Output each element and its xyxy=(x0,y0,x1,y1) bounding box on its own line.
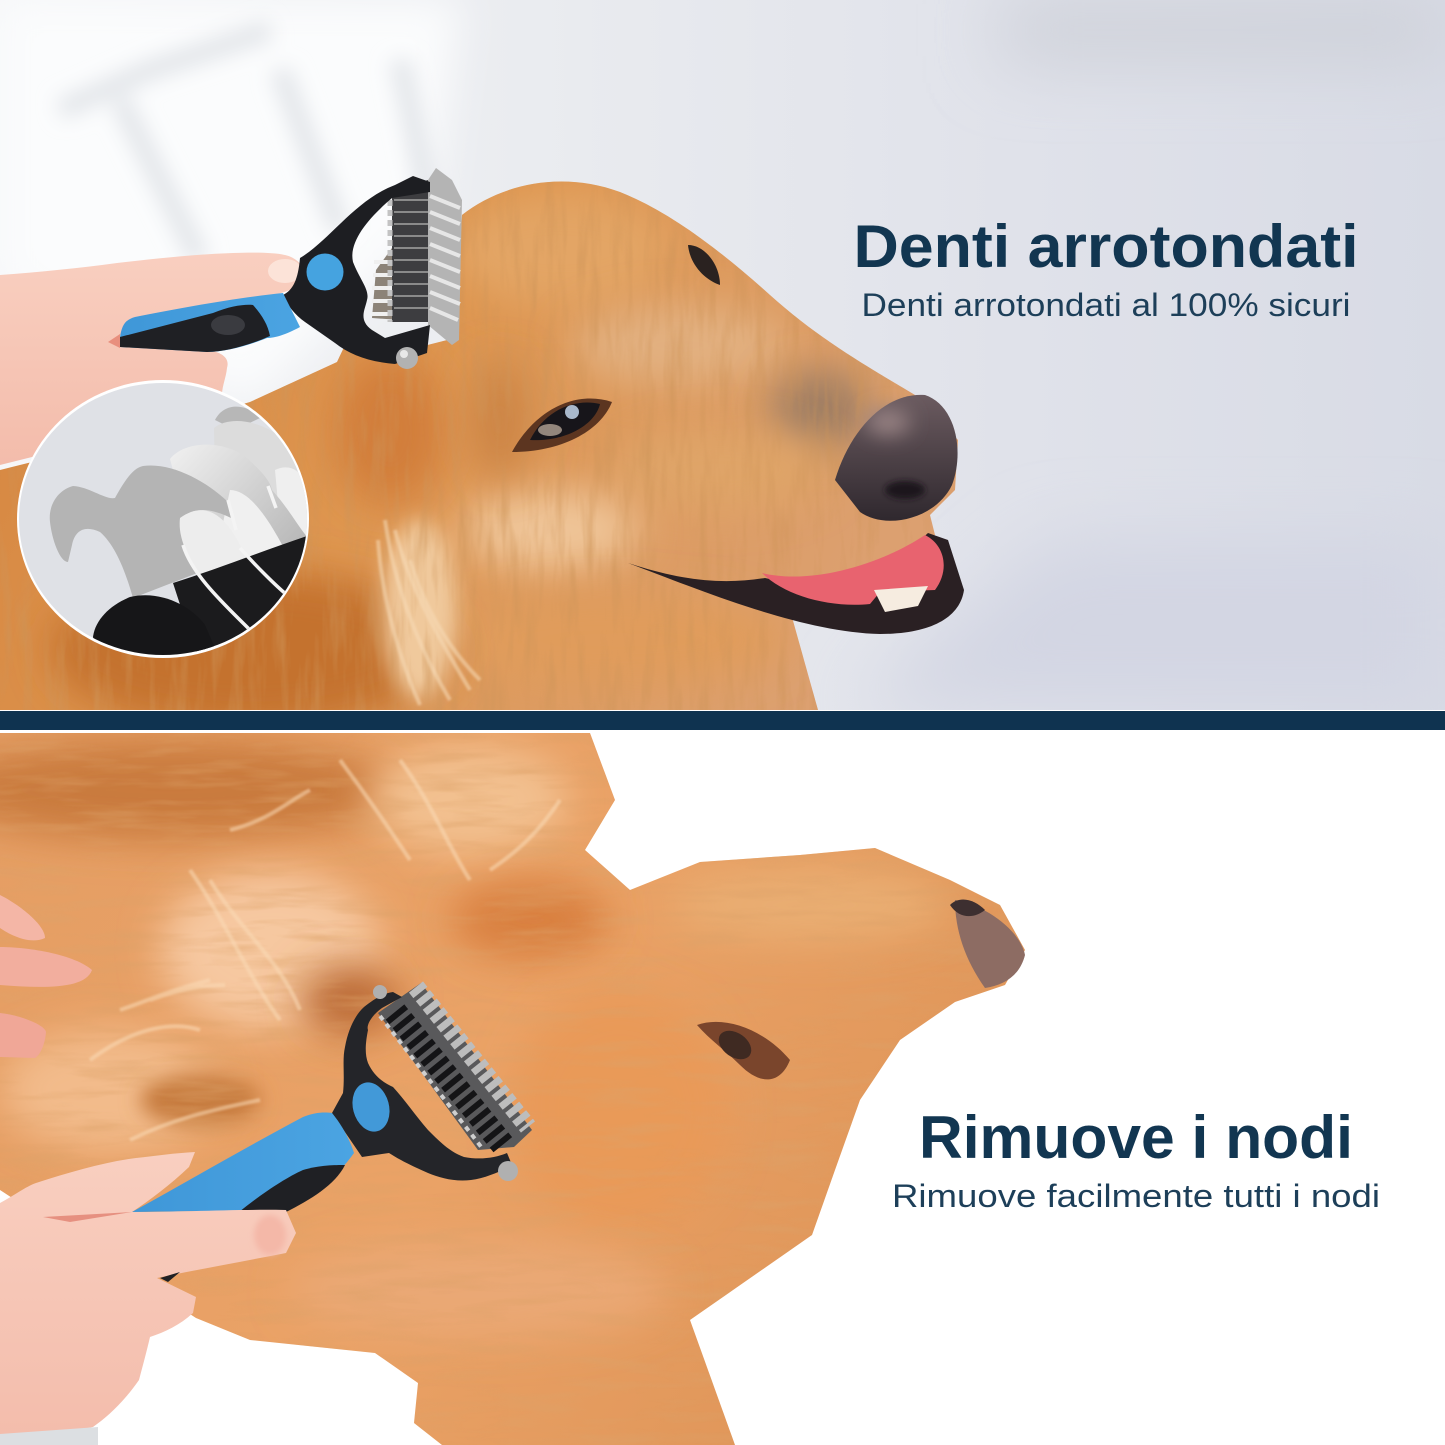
panel: top photo xyxy=(0,0,1445,730)
golden dog fur xyxy=(0,732,1100,1445)
hand bottom left xyxy=(0,1152,296,1445)
dog nostril xyxy=(950,900,985,916)
heading: Rimuove i nodi: Rimuove i nodi xyxy=(919,1104,1353,1171)
dog mouth xyxy=(628,533,964,634)
hand top xyxy=(0,253,304,465)
frame xyxy=(283,176,430,364)
dog nose xyxy=(955,900,1025,988)
rake tool top xyxy=(120,168,462,369)
handle xyxy=(132,1112,354,1212)
divider band xyxy=(0,711,1445,730)
text: Denti subtitle: Denti arrotondati al 100% sicuri xyxy=(862,287,1350,323)
heading: Denti arrotondati: Denti arrotondati xyxy=(854,213,1358,280)
dog head xyxy=(0,170,1000,730)
rake tool bottom xyxy=(132,983,532,1212)
dog eye xyxy=(697,1022,790,1079)
grey corner xyxy=(0,1427,98,1445)
dog far eye xyxy=(688,245,720,285)
dog eye xyxy=(512,399,612,452)
handle xyxy=(120,293,300,352)
inset: tooth close-up xyxy=(17,374,312,666)
panel: bottom photo xyxy=(0,732,1100,1445)
frame xyxy=(332,992,512,1181)
blade xyxy=(378,983,532,1150)
text: Rimuove subtitle: Rimuove facilmente tutti i nodi xyxy=(892,1178,1380,1214)
hand fingers left xyxy=(0,895,92,1058)
blade front teeth xyxy=(428,168,462,345)
back teeth xyxy=(372,248,392,320)
dog nose xyxy=(835,395,958,521)
